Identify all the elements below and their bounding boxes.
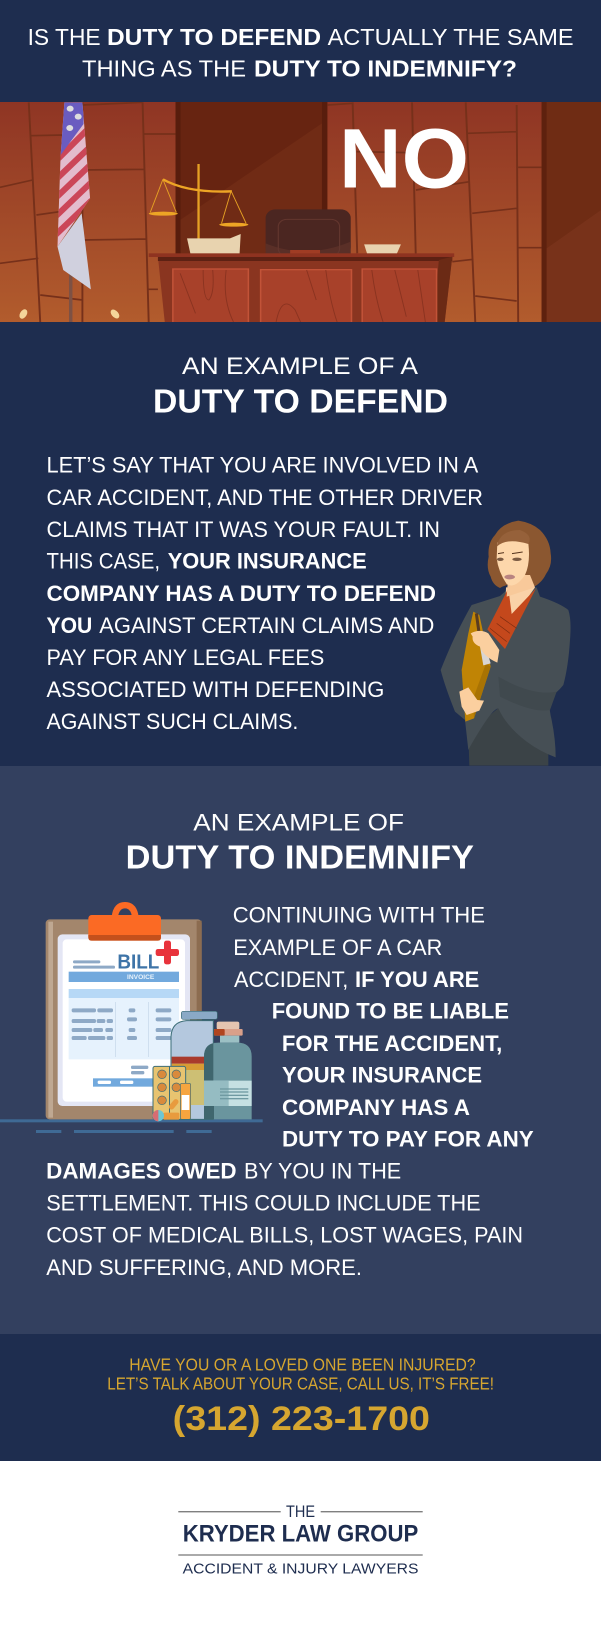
title: IS THE xyxy=(28,24,101,50)
heading: duty to indemnify: DUTY TO INDEMNIFY xyxy=(126,840,474,877)
text block: indemnify explanation: COMPANY HAS A xyxy=(282,1095,470,1120)
clipboard xyxy=(46,919,202,1119)
call to action text: LET’S TALK ABOUT YOUR CASE, CALL US, IT’S FREE! xyxy=(107,1373,494,1393)
alcove xyxy=(180,102,328,220)
floor lights xyxy=(20,309,28,319)
illustration: medical bill and medicine xyxy=(0,902,263,1133)
text block: indemnify explanation: BY YOU IN THE xyxy=(244,1159,401,1184)
text block: indemnify explanation: CONTINUING WITH THE xyxy=(233,903,485,928)
papers xyxy=(187,234,241,254)
logo: Kryder Law Group xyxy=(178,1503,423,1577)
heading: duty to defend xyxy=(153,353,448,421)
illustration: lawyer woman xyxy=(441,521,571,766)
heading: duty to defend: DUTY TO DEFEND xyxy=(153,384,448,421)
illustration: medical bill and medicine: INVOICE xyxy=(127,975,154,981)
title: DUTY TO DEFEND xyxy=(107,24,321,50)
panel: duty to defend example xyxy=(0,322,601,766)
answer: NO: NO xyxy=(339,112,469,206)
judge desk xyxy=(149,253,454,326)
text block: indemnify explanation: DAMAGES OWED xyxy=(46,1159,237,1184)
face xyxy=(497,541,529,585)
scarf xyxy=(487,588,536,649)
green bottle xyxy=(217,1022,239,1030)
text block: defend explanation: THIS CASE, xyxy=(46,549,160,574)
text block: defend explanation: YOU xyxy=(46,613,92,638)
courtroom illustration xyxy=(0,102,601,326)
tube xyxy=(180,1083,191,1119)
scales of justice xyxy=(149,164,248,239)
text block: indemnify explanation: DUTY TO PAY FOR ANY xyxy=(282,1127,534,1152)
call to action text: HAVE YOU OR A LOVED ONE BEEN INJURED? xyxy=(129,1355,476,1375)
panel: duty to indemnify example xyxy=(0,766,601,1334)
text block: defend explanation: PAY FOR ANY LEGAL FEES xyxy=(46,645,324,670)
right column xyxy=(542,102,601,323)
flag pole xyxy=(69,217,72,323)
text block: defend explanation xyxy=(46,453,483,734)
hair xyxy=(488,521,551,588)
blister pack xyxy=(153,1066,186,1119)
text block: indemnify explanation: EXAMPLE OF A CAR xyxy=(233,935,442,960)
text block: defend explanation: CLAIMS THAT IT WAS YOUR FAULT. IN xyxy=(46,517,440,542)
chest xyxy=(505,587,535,621)
skirt xyxy=(468,707,548,766)
text block: indemnify explanation: COST OF MEDICAL BILLS, LOST WAGES, PAIN xyxy=(46,1223,523,1248)
text block: indemnify explanation: AND SUFFERING, AND MORE. xyxy=(46,1255,362,1280)
call to action text xyxy=(107,1355,494,1393)
text block: indemnify explanation xyxy=(46,903,534,1280)
panel: call to action xyxy=(0,1334,601,1461)
text block: defend explanation: LET’S SAY THAT YOU ARE INVOLVED IN A xyxy=(46,453,478,478)
eyes and lips xyxy=(497,558,504,561)
panel: title header xyxy=(0,0,601,102)
text block: indemnify explanation: IF YOU ARE xyxy=(355,967,479,992)
bill title: BILL xyxy=(117,951,159,974)
text block: defend explanation: YOUR INSURANCE xyxy=(168,549,367,574)
text block: indemnify explanation: FOUND TO BE LIABLE xyxy=(272,999,509,1024)
medical cross xyxy=(156,941,179,964)
logo: Kryder Law Group: KRYDER LAW GROUP xyxy=(183,1521,418,1548)
text block: indemnify explanation: FOR THE ACCIDENT, xyxy=(282,1031,502,1056)
phone number: (312) 223-1700 xyxy=(173,1400,430,1438)
text block: defend explanation: CAR ACCIDENT, AND THE OTHER DRIVER xyxy=(46,485,483,510)
logo: Kryder Law Group: ACCIDENT & INJURY LAWYERS xyxy=(183,1561,418,1577)
pills xyxy=(168,1098,180,1111)
hands xyxy=(471,631,499,663)
text block: defend explanation: ASSOCIATED WITH DEFENDING xyxy=(46,677,384,702)
clip xyxy=(112,902,139,917)
neck xyxy=(507,575,535,597)
heading: duty to indemnify: AN EXAMPLE OF xyxy=(193,810,404,837)
title: THING AS THE xyxy=(82,56,246,82)
title: DUTY TO INDEMNIFY? xyxy=(254,56,517,82)
shelf xyxy=(0,1119,263,1122)
heading: duty to defend: AN EXAMPLE OF A xyxy=(182,353,419,380)
text block: defend explanation: AGAINST SUCH CLAIMS. xyxy=(46,709,298,734)
folder xyxy=(462,612,491,722)
title xyxy=(28,24,574,82)
title: ACTUALLY THE SAME xyxy=(328,24,574,50)
judge chair xyxy=(266,209,351,250)
text block: indemnify explanation: YOUR INSURANCE xyxy=(282,1063,482,1088)
jacket xyxy=(441,587,571,757)
text block: indemnify explanation: ACCIDENT, xyxy=(234,967,348,992)
text block: defend explanation: AGAINST CERTAIN CLAIMS AND xyxy=(99,613,434,638)
large bottle xyxy=(171,1021,213,1119)
pen xyxy=(480,646,491,665)
text block: indemnify explanation: SETTLEMENT. THIS COULD INCLUDE THE xyxy=(46,1191,481,1216)
text block: defend explanation: COMPANY HAS A DUTY TO DEFEND xyxy=(46,581,436,606)
invoice table xyxy=(69,989,179,998)
heading: duty to indemnify xyxy=(126,810,474,877)
flag xyxy=(57,213,91,289)
wall panel joints xyxy=(0,102,542,323)
logo: Kryder Law Group: THE xyxy=(286,1503,315,1521)
